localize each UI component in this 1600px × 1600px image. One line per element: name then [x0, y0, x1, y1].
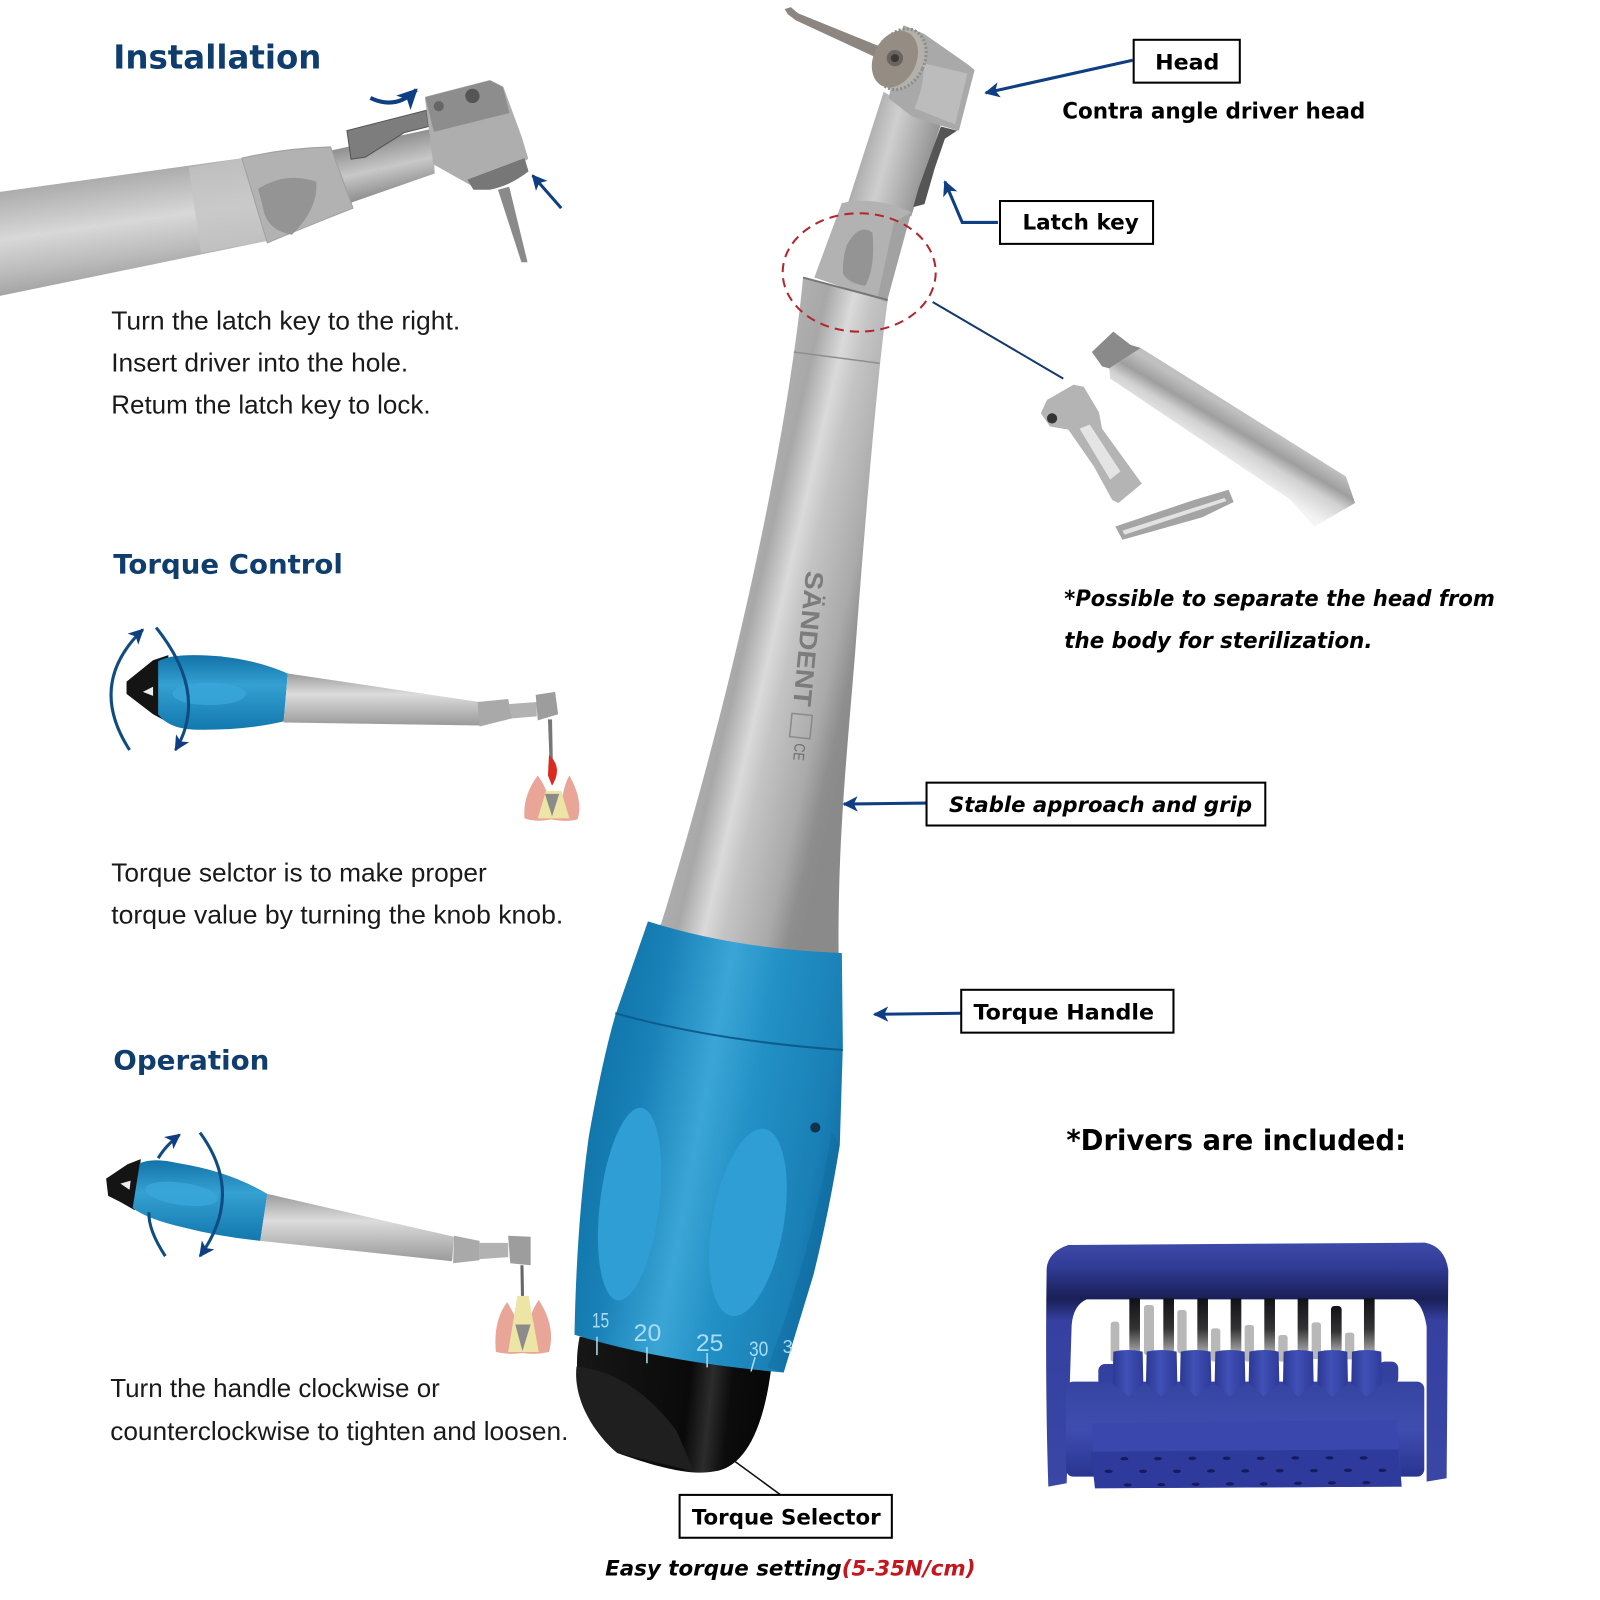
separated head highlight	[1080, 424, 1120, 480]
caption: torque range: Easy torque setting(5-35N/cm)	[605, 1557, 976, 1582]
label box: torque handle	[961, 990, 1173, 1033]
text: sterilization note: the body for sterilization.	[1064, 629, 1372, 654]
text: operation description: counterclockwise to tighten and loosen.	[110, 1418, 568, 1446]
collar	[814, 201, 911, 302]
CE mark: CE	[789, 742, 808, 761]
handle side shade	[767, 1133, 840, 1372]
arrow: insert driver	[533, 176, 561, 208]
hole rows	[1105, 1456, 1386, 1487]
handle seam	[615, 1013, 843, 1050]
body ring shadow	[803, 278, 888, 300]
callout: Latch key	[945, 182, 1153, 244]
head body	[890, 27, 973, 130]
illustration: small driver tilted with tooth	[106, 1159, 551, 1354]
callout: Torque Handle	[874, 990, 1173, 1033]
dark driver shanks	[1129, 1298, 1375, 1353]
label: stable grip: Stable approach and grip	[949, 793, 1252, 818]
torque scale: 25	[696, 1330, 723, 1357]
torque scale	[592, 1309, 793, 1371]
black torque selector cap	[577, 1337, 772, 1473]
slab	[1092, 1420, 1402, 1488]
text: operation description: Turn the handle clockwise or	[110, 1375, 440, 1403]
separated head	[1041, 385, 1142, 503]
text: torque control description	[111, 860, 563, 929]
label: contra angle driver head: Contra angle driver head	[1062, 99, 1365, 124]
frame	[1046, 1243, 1448, 1487]
heading: drivers included: *Drivers are included:	[1066, 1123, 1406, 1157]
heading: Torque Control: Torque Control	[113, 549, 343, 580]
text: installation steps: Insert driver into the hole.	[111, 349, 408, 377]
arrows: rotation	[111, 628, 189, 750]
callout: Torque Selector	[605, 1461, 976, 1582]
body seam	[794, 352, 880, 363]
label box: Latch key	[1000, 201, 1153, 244]
text: operation description	[110, 1375, 568, 1446]
label box: Head	[1134, 40, 1240, 83]
end stubs	[1098, 1362, 1398, 1387]
illustration: handpiece close-up with latch key	[0, 82, 529, 296]
label box: stable grip	[927, 783, 1265, 826]
label: torque handle: Torque Handle	[973, 1000, 1154, 1025]
handle screw hole	[810, 1122, 820, 1133]
text: torque control description: torque value by turning the knob knob.	[111, 901, 563, 929]
torque scale: 30	[749, 1337, 768, 1361]
tool body	[653, 278, 888, 969]
brand marking: SÄNDENT	[787, 570, 828, 708]
head dial	[863, 21, 936, 98]
arrow: turn latch key	[370, 90, 416, 103]
separated pin highlight	[1122, 498, 1227, 535]
driver bit	[785, 7, 884, 59]
illustration: separated parts	[1041, 332, 1355, 540]
arrow: head	[986, 60, 1133, 93]
contra angle neck	[847, 92, 941, 216]
panel: installation	[0, 38, 561, 419]
silver driver tips	[1111, 1305, 1354, 1362]
panel: operation	[106, 1045, 568, 1446]
label: Head: Head	[1155, 50, 1219, 75]
text: torque control description: Torque selctor is to make proper	[111, 860, 487, 888]
tube gear end	[1092, 332, 1141, 368]
torque scale: 15	[592, 1309, 609, 1333]
label box: selector	[680, 1495, 892, 1538]
handle grip ovals	[588, 1104, 800, 1322]
text: sterilization note	[1064, 587, 1495, 654]
separated pin	[1115, 490, 1234, 540]
illustration: blue driver organizer	[1046, 1243, 1448, 1488]
text: installation steps: Turn the latch key to the right.	[111, 308, 460, 336]
arrow: latch key	[945, 182, 998, 222]
torque scale: 3	[783, 1336, 793, 1357]
arrows: clockwise and counterclockwise rotation	[149, 1133, 222, 1256]
text: installation steps	[111, 308, 460, 419]
torque scale: 20	[634, 1320, 661, 1347]
main product: torque driver handpiece	[574, 7, 973, 1473]
leader line: selector	[735, 1461, 781, 1495]
arrow: stable grip	[844, 803, 927, 804]
label: selector: Torque Selector	[692, 1505, 881, 1530]
collar button	[843, 229, 873, 286]
certification box	[790, 713, 812, 739]
text: installation steps: Retum the latch key to lock.	[111, 391, 431, 419]
leader line to separated parts	[933, 302, 1063, 379]
driver sockets	[1113, 1350, 1382, 1397]
label: Latch key: Latch key	[1022, 211, 1139, 236]
dashed circle: separation point	[783, 213, 936, 332]
arrow: torque handle	[874, 1013, 961, 1014]
heading: Installation: Installation	[113, 38, 321, 76]
latch key plate	[913, 127, 957, 207]
callout: Stable approach and grip	[844, 783, 1265, 826]
text: sterilization note: *Possible to separate the head from	[1064, 587, 1495, 612]
barrel	[1066, 1382, 1424, 1477]
illustration: small torque driver with tooth	[127, 655, 579, 821]
callout: Head	[986, 40, 1365, 124]
blue torque handle	[574, 921, 843, 1372]
separated tube	[1109, 348, 1355, 527]
heading: Operation: Operation	[113, 1045, 269, 1076]
collar shade	[878, 212, 911, 302]
cap facet	[576, 1366, 694, 1471]
panel: torque control	[111, 549, 579, 929]
